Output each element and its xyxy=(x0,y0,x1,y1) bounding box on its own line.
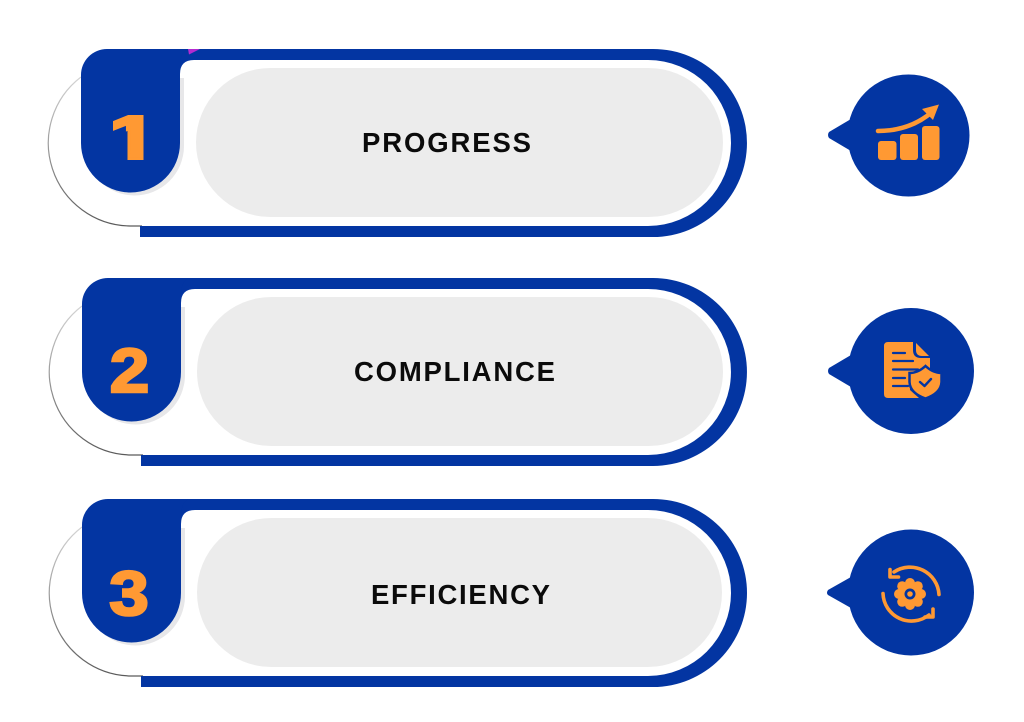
heading: progress: PROGRESS xyxy=(362,127,531,158)
tab shadow xyxy=(85,78,184,196)
number 2: 2 xyxy=(110,337,149,406)
tab: number 1 xyxy=(81,49,187,192)
outline: left curved edge xyxy=(49,527,143,676)
frame: white interior xyxy=(170,60,731,226)
heading: compliance: COMPLIANCE xyxy=(354,356,555,387)
heading: efficiency: EFFICIENCY xyxy=(371,579,550,610)
frame: white interior xyxy=(171,510,731,676)
label pill xyxy=(196,68,723,217)
tab shadow xyxy=(86,528,185,646)
icon: bars with rising arrow xyxy=(878,104,940,160)
icon badge: compliance document xyxy=(828,308,974,434)
speech bubble xyxy=(827,530,974,656)
label pill xyxy=(197,297,723,446)
number 1: 1 xyxy=(105,103,160,172)
frame: white interior xyxy=(171,289,731,455)
number 3: 3 xyxy=(109,560,149,629)
tab: number 2 xyxy=(82,278,188,422)
icon badge: growth chart xyxy=(828,74,970,196)
tab: number 3 xyxy=(82,499,188,642)
panel: row 1 progress xyxy=(48,49,747,237)
panel: row 3 efficiency xyxy=(49,499,747,687)
frame: blue outer pill xyxy=(141,278,747,466)
frame: blue outer pill xyxy=(140,49,747,237)
speech bubble xyxy=(828,74,970,196)
icon badge: efficiency gear xyxy=(827,530,974,656)
icon: gear with cycle arrows xyxy=(883,567,939,621)
panel: row 2 compliance xyxy=(49,278,747,466)
frame: blue outer pill xyxy=(141,499,747,687)
icon: document with shield xyxy=(884,342,942,398)
speech bubble xyxy=(828,308,974,434)
label pill xyxy=(197,518,722,667)
outline: left curved edge xyxy=(48,77,142,226)
tab shadow xyxy=(86,307,185,425)
outline: left curved edge xyxy=(49,306,143,455)
accent: purple sliver xyxy=(188,49,200,54)
